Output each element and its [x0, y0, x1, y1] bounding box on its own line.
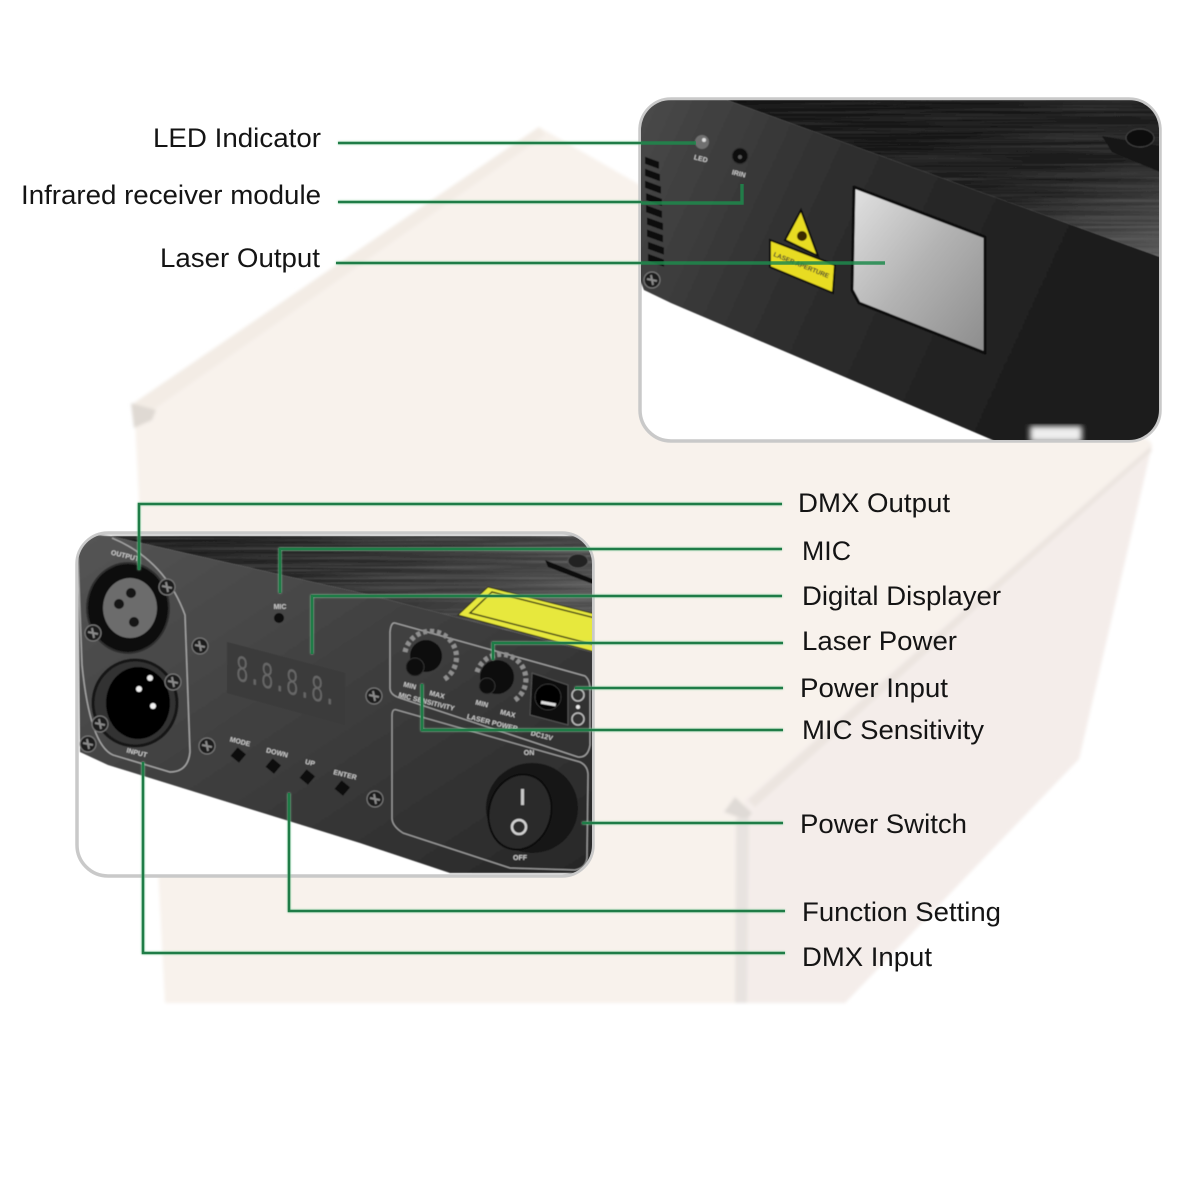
MIC hole: MIC — [274, 604, 286, 611]
panel screws — [80, 579, 383, 807]
leader: LED Indicator — [338, 142, 696, 144]
vent slots — [645, 157, 664, 267]
LED indicator: LED — [693, 154, 708, 165]
function buttons — [229, 737, 357, 796]
DMX output socket: OUTPUT — [110, 550, 140, 564]
label: Infrared receiver module: Infrared receiver module — [21, 180, 321, 210]
leader: MIC Sensitivity — [422, 684, 783, 730]
label: MIC Sensitivity: MIC Sensitivity — [802, 715, 984, 745]
MIC sensitivity knob: MAX — [428, 690, 446, 701]
digital display: 8.8.8.8. — [236, 649, 336, 718]
leader: Digital Displayer — [312, 596, 782, 654]
leader: Infrared receiver module — [338, 184, 742, 203]
MIC sensitivity knob: MIC SENSITIVITY — [398, 692, 455, 713]
laser warning label — [770, 210, 835, 293]
function buttons: MODE — [229, 737, 251, 749]
laser power knob: MAX — [499, 709, 516, 720]
leader: Power Input — [575, 687, 783, 689]
function buttons: DOWN — [265, 747, 288, 760]
LED indicator — [693, 135, 709, 165]
label: Laser Power: Laser Power — [802, 626, 957, 656]
label: Laser Output: Laser Output — [160, 243, 321, 273]
label: LED Indicator: LED Indicator — [153, 123, 321, 153]
screw — [644, 272, 660, 288]
soft reflection — [1030, 426, 1082, 442]
laser power knob: MIN — [475, 700, 489, 709]
MIC sensitivity knob: MIN — [403, 682, 417, 691]
DMX input plug — [93, 660, 177, 760]
inset panel: front of unit with laser output — [640, 99, 1160, 442]
inset panel: rear control panel — [77, 533, 595, 876]
laser power knob: LASER POWER — [466, 714, 518, 733]
leader: DMX Input — [143, 762, 785, 953]
label: DMX Output: DMX Output — [798, 488, 951, 518]
label: Digital Displayer: Digital Displayer — [802, 581, 1001, 611]
power input jack: DC12V — [530, 730, 554, 743]
laser output window — [852, 187, 985, 353]
XLR connector housing outline — [78, 538, 190, 772]
power switch: ON — [524, 750, 534, 757]
label: Power Input: Power Input — [800, 673, 949, 703]
digital display — [228, 642, 332, 705]
leader: Function Setting — [289, 793, 785, 911]
power switch: OFF — [513, 855, 528, 862]
warning sticker — [458, 587, 595, 652]
leader: Power Switch — [582, 822, 783, 824]
MIC hole — [274, 604, 286, 623]
laser warning label: LASER APERTURE — [772, 251, 831, 280]
laser power knob — [466, 654, 526, 733]
front face of the unit — [640, 100, 1160, 441]
leader: Laser Power — [493, 643, 783, 660]
label: DMX Input: DMX Input — [802, 942, 932, 972]
front face of rear panel — [78, 534, 595, 873]
function buttons: UP — [304, 759, 316, 768]
power input jack — [530, 673, 584, 743]
DMX output socket — [87, 550, 169, 653]
label: MIC: MIC — [802, 536, 851, 566]
leader: DMX Output — [139, 504, 782, 570]
MIC sensitivity knob — [398, 631, 456, 713]
function buttons: ENTER — [333, 769, 357, 782]
top face of rear panel — [110, 536, 595, 656]
background: pale product box — [131, 127, 1152, 1003]
leader: Laser Output — [336, 262, 885, 264]
infrared receiver — [731, 148, 748, 180]
leader: MIC — [280, 549, 782, 593]
top face of the unit — [727, 100, 1160, 260]
infrared receiver: IRIN — [731, 169, 746, 180]
power switch — [480, 750, 578, 862]
DMX input plug: INPUT — [126, 748, 148, 760]
switch panel outline — [392, 710, 588, 870]
label: Function Setting: Function Setting — [802, 897, 1001, 927]
label: Power Switch: Power Switch — [800, 809, 967, 839]
knob panel outline — [390, 623, 590, 757]
